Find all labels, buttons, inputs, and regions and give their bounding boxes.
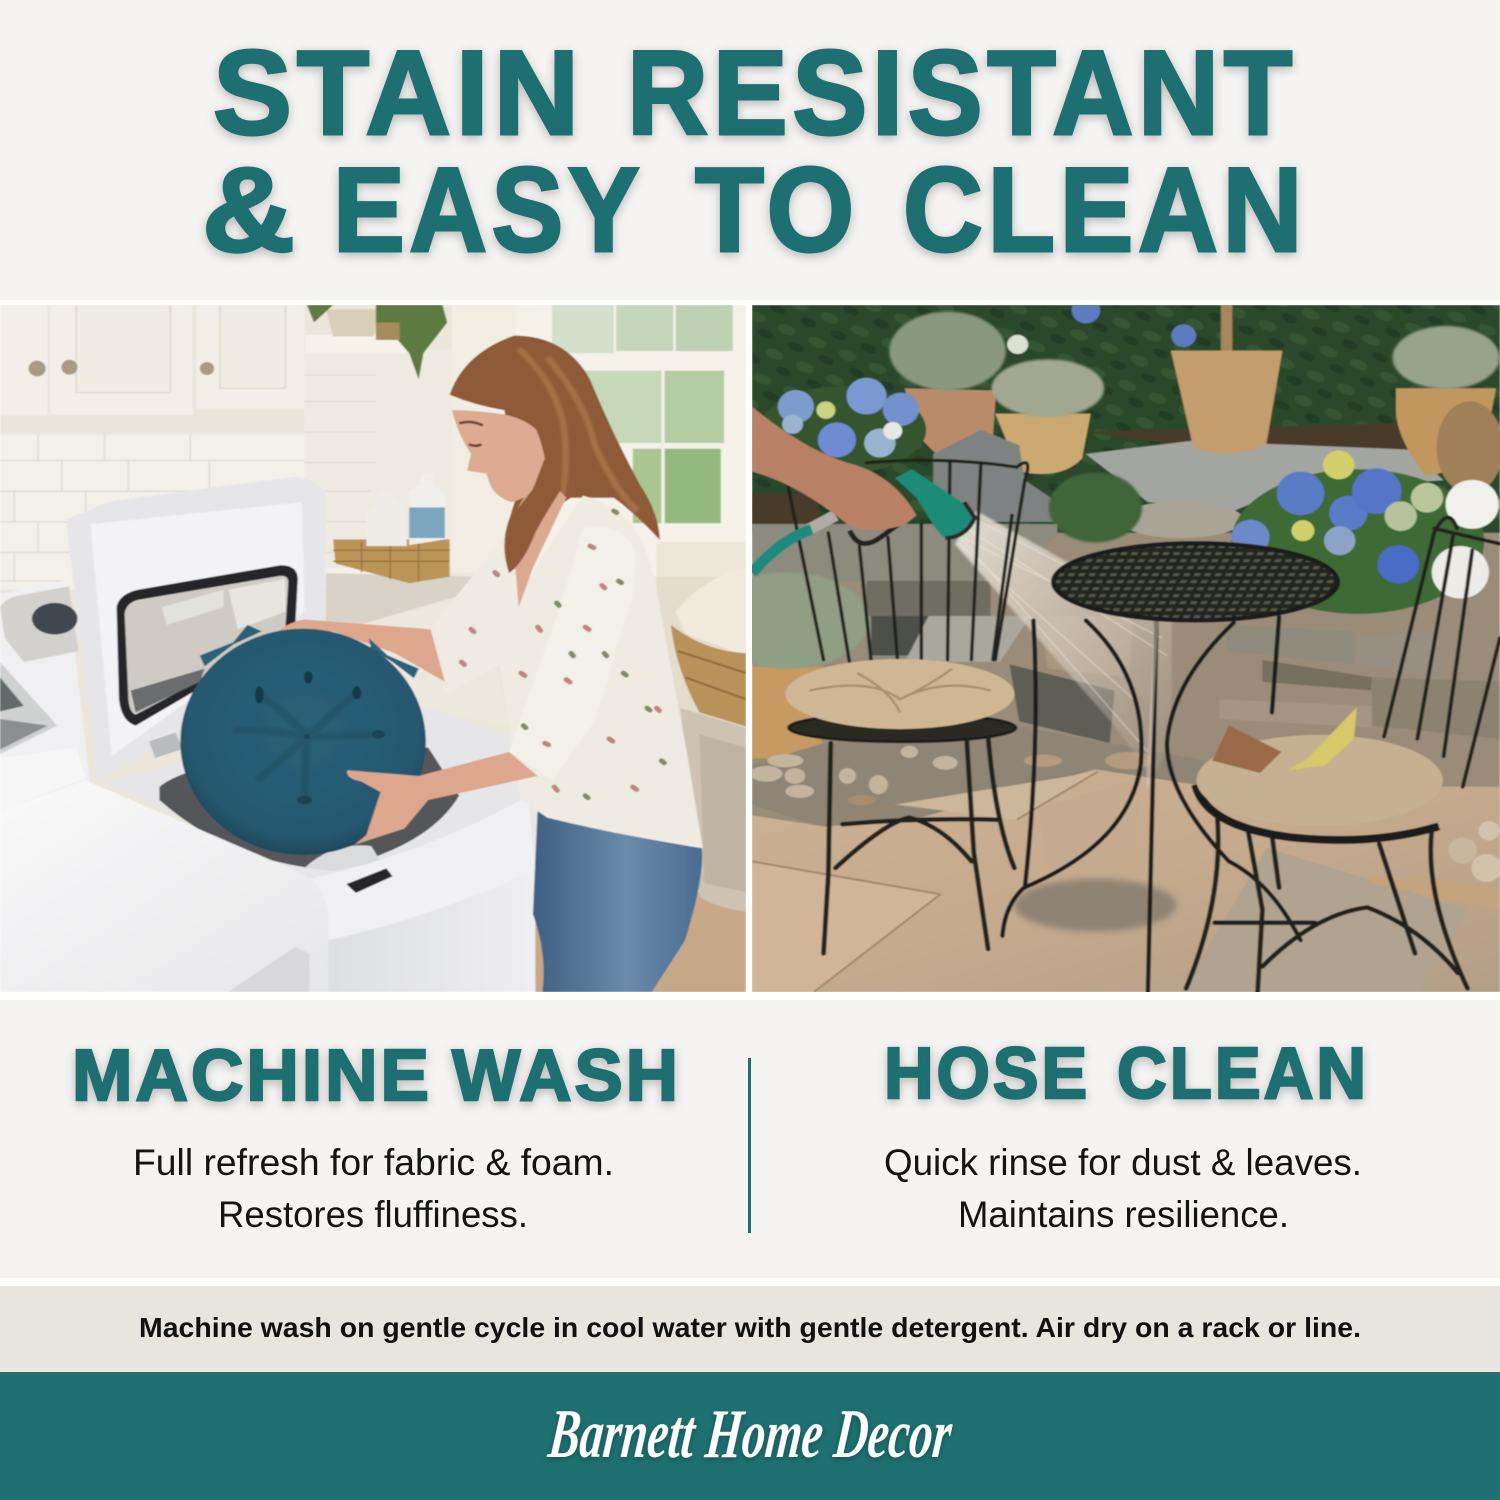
footer brand bar xyxy=(0,1372,1500,1500)
title: RESISTANT xyxy=(627,26,1297,160)
woman xyxy=(431,336,703,992)
title: TO xyxy=(695,143,859,277)
text: machine wash description: Restores fluffiness. xyxy=(218,1194,528,1235)
upper arm and hand xyxy=(274,620,445,682)
left chair seat xyxy=(789,714,1016,742)
photo: hose rinsing a cushion on a garden patio xyxy=(707,297,1500,992)
title: STAIN xyxy=(213,26,584,160)
photo strip backing xyxy=(0,300,1500,1000)
centre divider xyxy=(748,1058,751,1233)
white separator xyxy=(0,1278,1500,1286)
footer brand bar: Barnett Home Decor xyxy=(545,1395,956,1473)
left hydrangeas xyxy=(759,297,1196,474)
water spray xyxy=(955,511,1172,778)
patio flagstones xyxy=(752,769,1500,992)
text: hose clean description: Quick rinse for dust & leaves. xyxy=(884,1142,1362,1183)
panel: hose clean xyxy=(884,1034,1369,1235)
care instruction band: Machine wash on gentle cycle in cool water with gentle detergent. Air dry on a rack or line. xyxy=(139,1312,1361,1343)
photo: woman loading a cushion into a washing machine xyxy=(0,305,746,992)
upper cabinets xyxy=(0,305,305,435)
text: machine wash description xyxy=(133,1142,614,1235)
heading: machine wash: WASH xyxy=(452,1036,681,1116)
heading: machine wash xyxy=(72,1036,681,1116)
right hydrangeas xyxy=(1231,450,1499,614)
title xyxy=(202,26,1307,277)
washer deck, tub and body xyxy=(102,706,535,992)
heading: hose clean: CLEAN xyxy=(1117,1034,1369,1114)
blouse sleeve xyxy=(510,746,514,754)
chest and neck xyxy=(514,491,567,607)
washer lid xyxy=(66,477,326,783)
washer control panel surround xyxy=(0,580,90,813)
window xyxy=(452,305,746,577)
title: EASY xyxy=(333,143,644,277)
heading: machine wash: MACHINE xyxy=(72,1036,432,1116)
bistro table xyxy=(1002,543,1338,992)
blouse body xyxy=(431,496,703,848)
heading: hose clean xyxy=(884,1034,1369,1114)
right chair seat rim xyxy=(1196,785,1439,840)
stone walls xyxy=(752,524,1500,778)
hedge xyxy=(752,305,1500,533)
right tan cushion and leaves xyxy=(1197,707,1443,826)
subway tile backsplash xyxy=(0,434,373,590)
text: hose clean description: Maintains resilience. xyxy=(958,1194,1289,1235)
back patio xyxy=(1086,441,1444,511)
eye and brow xyxy=(459,422,483,446)
mulch xyxy=(752,423,1410,524)
countertop and beadboard xyxy=(326,573,472,624)
shelf with plants xyxy=(305,305,447,379)
lower right wall, cabinet and floor xyxy=(523,577,746,992)
jeans xyxy=(533,809,702,992)
lower arm and hand xyxy=(347,752,538,845)
cushion ties xyxy=(200,625,419,678)
pebble bed behind table xyxy=(1130,502,1242,538)
text: hose clean description xyxy=(884,1142,1362,1235)
care instruction band xyxy=(0,1286,1500,1372)
title: & xyxy=(202,143,295,277)
left tan cushion xyxy=(785,659,1014,729)
driftwood and stones xyxy=(1370,821,1500,909)
title: CLEAN xyxy=(903,143,1307,277)
basket and bottles xyxy=(333,474,450,583)
hair back xyxy=(450,336,660,573)
left chair xyxy=(788,460,1028,953)
photo base xyxy=(752,305,1500,992)
right chair xyxy=(1186,517,1500,992)
floral print xyxy=(462,511,664,798)
pebble bed xyxy=(750,721,1205,826)
panel: machine wash xyxy=(72,1036,681,1235)
teal cushion xyxy=(180,629,426,855)
front top-load machine xyxy=(0,780,328,992)
text: machine wash description: Full refresh for fabric & foam. xyxy=(133,1142,614,1183)
towels and wicker basket xyxy=(671,568,746,726)
heading: hose clean: HOSE xyxy=(884,1034,1090,1114)
hair lock xyxy=(504,429,561,574)
face xyxy=(452,410,547,502)
arm with hose nozzle xyxy=(752,407,975,573)
pots and plants xyxy=(889,305,1500,542)
left potted lavender xyxy=(707,572,869,758)
